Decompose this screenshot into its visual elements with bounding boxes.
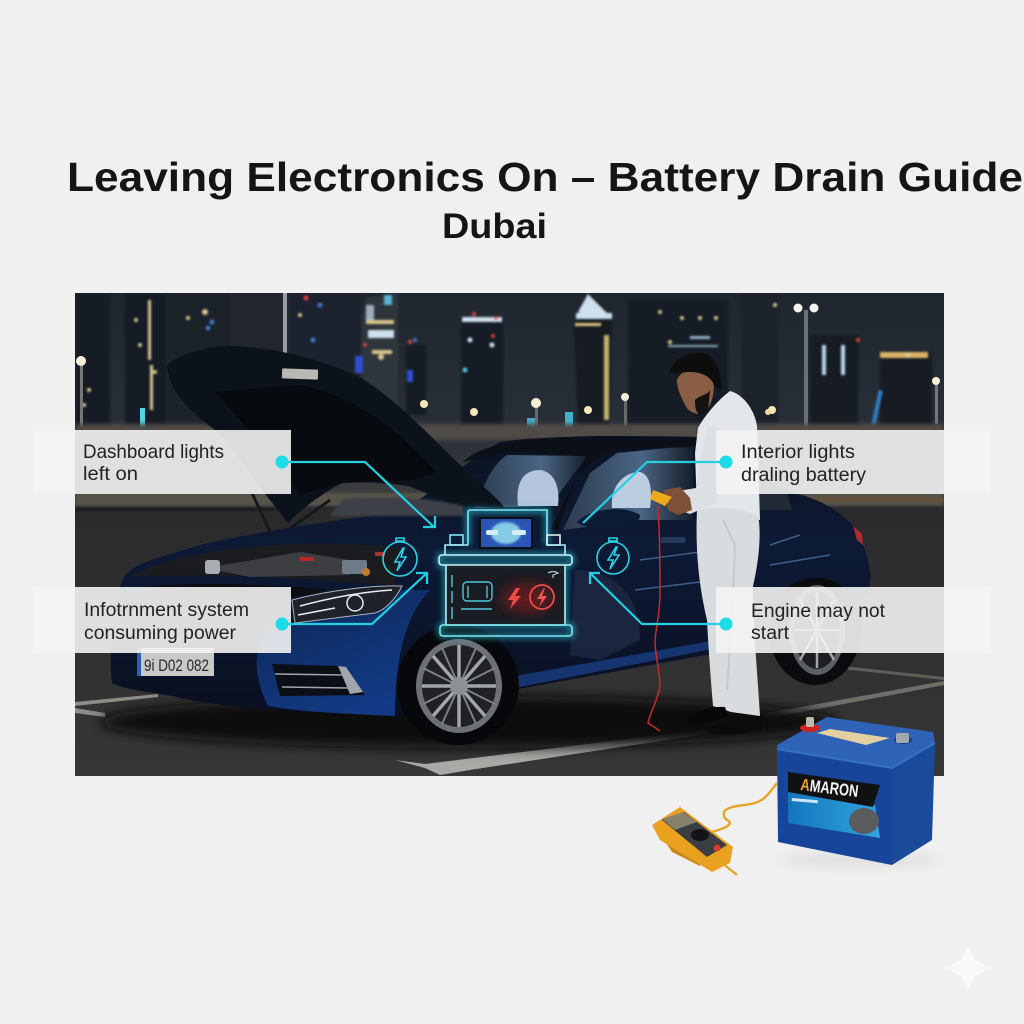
engine image on label [849, 808, 879, 834]
infotainment screen [480, 518, 532, 548]
black brand band [788, 772, 880, 807]
top sticker [817, 729, 890, 745]
lower air intake [272, 664, 365, 696]
label: infotainment [34, 587, 291, 653]
small wiper icon [548, 572, 558, 578]
street lamps [76, 293, 940, 434]
meter display [662, 812, 697, 830]
label: infotainment: consuming power [84, 623, 237, 644]
overalls [697, 508, 760, 716]
shoe right [707, 717, 762, 734]
shoes [687, 707, 728, 723]
raised hood [167, 346, 505, 523]
screen readout [486, 530, 526, 535]
probe wire [712, 783, 777, 832]
headlight [292, 586, 402, 623]
door handle [660, 537, 686, 543]
front wheel [397, 625, 519, 745]
line engine [590, 573, 726, 624]
red warning circle [530, 585, 554, 609]
meter front panel [662, 812, 727, 857]
roof line [463, 436, 697, 530]
panel: night scene photo [75, 293, 944, 776]
parking lines [75, 665, 944, 775]
infographic canvas [70, 162, 1022, 876]
red terminal [800, 717, 820, 732]
red test lead [648, 506, 660, 731]
hood prop rods [252, 493, 330, 536]
engine details [150, 552, 385, 598]
beard [695, 390, 710, 415]
label: interior lights: draling battery [741, 465, 867, 486]
label: infotainment: Infotrnment system [84, 600, 249, 621]
car icon on battery [452, 575, 492, 623]
uniform torso [695, 391, 760, 520]
illustration: multimeter [652, 783, 777, 875]
subtitle: Dubai [442, 207, 547, 246]
license plate: 9i D02 082 [144, 656, 209, 675]
line infotainment [282, 573, 427, 624]
cyan connector lines [282, 462, 726, 624]
tail light [853, 526, 863, 545]
head [677, 370, 714, 414]
label: dashboard lights [34, 430, 291, 494]
side mirror [577, 509, 640, 527]
brand name: AMARON [800, 775, 859, 801]
connector dots [276, 456, 732, 630]
hood inner panel [215, 385, 436, 495]
parking lot ground [75, 495, 944, 776]
technician [648, 353, 762, 734]
central battery hologram glow [439, 511, 572, 636]
license plate [137, 648, 214, 676]
handheld meter [650, 490, 672, 506]
hood lamp [282, 368, 318, 380]
arrowheads [416, 516, 600, 584]
battery front [777, 748, 892, 865]
meter dial [691, 829, 709, 841]
meter base wedge [664, 840, 700, 866]
bolt icon right [597, 538, 629, 574]
label: engine may not start [716, 587, 990, 653]
label: engine may not start: Engine may not [751, 601, 886, 622]
distant windshield under hood [330, 497, 463, 516]
headlight highlights [298, 590, 392, 615]
battery shadow [780, 853, 940, 867]
screen glow [491, 522, 521, 544]
hair and beard [670, 353, 721, 390]
label: interior lights [716, 430, 990, 494]
line dashboard [282, 462, 434, 527]
horizon glow [75, 424, 944, 440]
bolt icon left [383, 538, 417, 576]
probe tail [722, 863, 737, 875]
battery ridge [777, 743, 935, 768]
car body [111, 436, 870, 716]
label: engine may not start: start [751, 623, 790, 644]
label: dashboard lights: Dashboard lights [83, 442, 224, 463]
rear wheel [773, 578, 857, 685]
battery outline [439, 510, 572, 636]
night sky [75, 293, 944, 503]
seat rear [612, 472, 651, 508]
rear window [759, 494, 792, 510]
meter red button [714, 844, 720, 852]
red glow [501, 583, 553, 613]
arm [667, 425, 723, 514]
illustration: Amaron battery [777, 717, 940, 867]
building window lights [82, 294, 928, 425]
overall folds [723, 520, 735, 690]
door reflection figure [570, 570, 640, 660]
battery top [777, 717, 935, 768]
sill highlight [515, 640, 717, 688]
title: Leaving Electronics On – Battery Drain Guide [67, 154, 1023, 200]
car shadow [100, 696, 840, 748]
grey terminal [894, 733, 912, 744]
watermark sparkle [943, 944, 993, 992]
seats [517, 470, 558, 506]
label: dashboard lights: left on [83, 464, 138, 485]
central battery hologram [439, 510, 572, 636]
barrier strip [75, 493, 944, 511]
red lightning [508, 588, 521, 609]
line interior [583, 462, 726, 523]
blue label [788, 790, 880, 838]
label: interior lights: Interior lights [741, 442, 855, 463]
meter body [652, 807, 733, 872]
door highlights [635, 535, 830, 590]
engine bay [132, 544, 400, 585]
windshield [475, 455, 587, 508]
hands [663, 487, 692, 515]
battery side [892, 743, 935, 865]
front door window [563, 443, 693, 530]
label small text [792, 798, 818, 803]
front fender [257, 590, 430, 716]
battery case fill [446, 565, 565, 625]
city skyline [75, 293, 932, 428]
